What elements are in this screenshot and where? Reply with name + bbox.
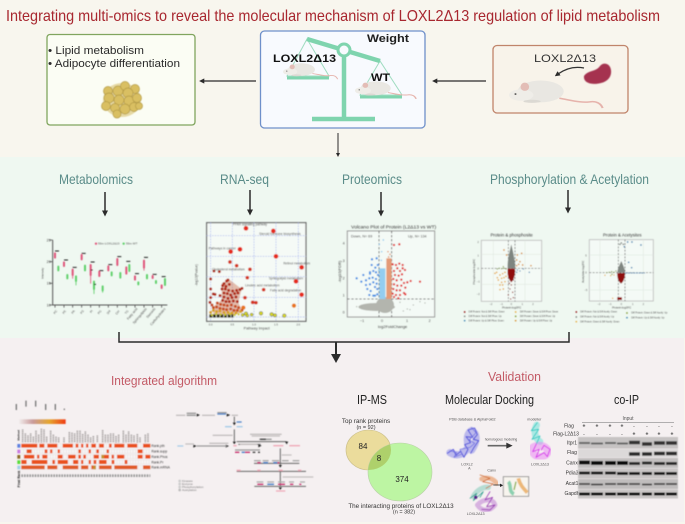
chart: metabolomics dot plot: PC (52, 309, 59, 315)
panel: co-IP western blot: Pdia3 (566, 470, 579, 476)
label: LOXL2Δ13: LOXL2Δ13 (534, 53, 596, 65)
chart: protein and acetylation scatter: 2 (643, 302, 645, 306)
legend: phosphosite categories: Diff Protein: Not & Diff Phos: Up (469, 315, 502, 318)
chart: RNA-seq pathway bubble plot: Steroid hormone biosynthesis (259, 232, 301, 236)
chart: RNA-seq pathway bubble plot: Fatty acid degradation (270, 289, 301, 293)
chart: IP-MS Venn diagram: (n = 382) (393, 510, 415, 516)
chart: metabolomics dot plot: PA (70, 309, 76, 315)
chart: proteomics volcano plot: 3 (343, 259, 345, 263)
chart: proteomics volcano plot: -log10(FDR) (337, 260, 342, 283)
panel: co-IP western blot: - (671, 424, 673, 430)
chart: metabolomics dot plot: PE (62, 309, 67, 315)
legend: phosphosite categories (464, 311, 559, 322)
chart: IP-MS Venn diagram: (n = 92) (356, 425, 376, 431)
legend: pathway symbols: Phosphorylation (182, 485, 204, 489)
label: input: Input (622, 416, 634, 422)
heading: metabolomics: Metabolomics (59, 171, 133, 187)
chart: proteomics volcano plot: 2 (429, 319, 431, 323)
legend: pathway symbols: Kinases (182, 479, 193, 483)
chart: protein and acetylation scatter: −1 (609, 302, 612, 306)
chart: rank heatmap: Rank.Pr (151, 460, 164, 464)
inset: binding interface (503, 477, 529, 496)
background: integration and validation section (0, 338, 684, 522)
chart: protein and acetylation scatter: 5 (585, 253, 587, 257)
chart: protein and phosphosite scatter: 2 (477, 240, 479, 244)
chart: RNA-seq pathway bubble plot: Cholesterol metabolism (212, 268, 245, 272)
label: LOXL2Δ13 group: LOXL2Δ13 (273, 53, 336, 65)
chart: metabolomics dot plot: 20 (47, 260, 51, 264)
icon: mouse (509, 81, 603, 108)
arrow: homologous modeling (488, 443, 507, 448)
legend: acetylation categories: Diff Protein: Down & Diff Acetly: Up (631, 312, 668, 315)
chart: protein and phosphosite scatter: 0 (511, 302, 513, 306)
panel: molecular docking structures: A (468, 467, 471, 471)
legend: acetylation categories: Diff Protein: Not & Diff Acetly: Down (580, 311, 618, 314)
chart: protein and phosphosite scatter: 1 (522, 302, 524, 306)
chart: molecular pathway diagram (176, 413, 313, 492)
text: lipid metabolism bullets (48, 45, 180, 70)
panel: co-IP western blot: + (671, 432, 674, 438)
chart: proteomics volcano plot: 2 (343, 276, 345, 280)
panel: molecular docking structures: homologous modeling (485, 438, 517, 442)
chart: proteomics volcano plot: 1 (406, 319, 408, 323)
chart: rank heatmap: Rank.Phos (151, 455, 168, 459)
text: lipid metabolism bullets: • Lipid metabolism (48, 45, 144, 57)
chart: RNA-seq pathway bubble plot: Pathways in cancer (209, 247, 236, 251)
chart: rank heatmap (16, 401, 171, 487)
arrow: omics bracket to integration (119, 332, 569, 363)
heading: RNA-seq: RNA-seq (220, 171, 269, 187)
panel: co-IP western blot: Flag (564, 424, 574, 430)
chart: protein and phosphosite scatter: −2 (477, 292, 480, 296)
chart: RNA-seq pathway bubble plot: -log10(Pvalue) (194, 264, 198, 286)
heading: phosphorylation and acetylation: Phosphorylation & Acetylation (490, 171, 649, 187)
icon: balance scale (287, 39, 402, 119)
chart: RNA-seq pathway bubble plot: Pathway Impact (244, 327, 270, 331)
chart: metabolomics dot plot: 15 (47, 282, 51, 286)
chart: protein and phosphosite scatter: 1 (477, 253, 479, 257)
panel: co-IP western blot: Canx (566, 460, 578, 466)
legend: pathway symbols (178, 479, 204, 492)
chart: metabolomics dot plot: Carbohydrates (149, 307, 167, 326)
chart: metabolomics dot plot: SM (106, 309, 112, 315)
panel: co-IP western blot: Itpr1 (567, 440, 577, 446)
structure: docked complex (470, 475, 497, 510)
legend: phosphosite categories: Diff Protein: Down & Diff Phos: Up (520, 315, 556, 318)
arrow: proteomics (380, 192, 382, 212)
chart: proteomics volcano plot: Volcano Plot of Protein (L2Δ13 vs WT) (351, 225, 437, 230)
heatmap row colours (17, 444, 20, 469)
chart: proteomics volcano plot: −1 (360, 319, 364, 323)
panel: weight scale (260, 31, 425, 128)
text: lipid metabolism bullets: • Adipocyte differentiation (48, 58, 180, 70)
panel: co-IP western blot: + (658, 432, 661, 438)
panel: molecular docking structures: LOXL2Δ13 (467, 512, 485, 516)
chart: IP-MS Venn diagram: 8 (377, 454, 382, 463)
heading: proteomics: Proteomics (342, 171, 402, 187)
chart: protein and phosphosite scatter: 2 (532, 302, 534, 306)
chart: IP-MS Venn diagram: 374 (395, 475, 409, 484)
venn: interacting proteins (368, 443, 432, 501)
chart: metabolomics dot plot: TG (124, 309, 130, 315)
chart: proteomics volcano plot: Up, N= 134 (408, 235, 427, 239)
chart: metabolomics dot plot: Fatty acid (126, 307, 139, 321)
chart: IP-MS Venn diagram: 84 (359, 442, 368, 451)
legend: pathway symbols: Enzyme (182, 482, 193, 486)
chart: RNA-seq pathway bubble plot: 1.5 (274, 323, 278, 327)
chart: RNA-seq pathway bubble plot: Linoleic acid metabolism (245, 284, 280, 288)
chart: proteomics volcano plot: 0 (343, 311, 345, 315)
legend: phosphosite categories: Diff Protein: Not & Diff Phos: Down (469, 311, 505, 314)
heading: co-IP: co-IP (614, 392, 639, 407)
chart: metabolomics dot plot (40, 238, 167, 326)
chart: rank heatmap: Rank.mRNA (151, 466, 171, 470)
chart: proteomics volcano plot: 0 (381, 319, 383, 323)
icon: tissue (584, 64, 611, 84)
panel: co-IP western blot: + (633, 432, 636, 438)
legend: acetylation categories: Diff Protein: Not & Diff Acetly: Up (580, 316, 615, 319)
chart: protein and phosphosite scatter: −2 (489, 302, 493, 306)
chart: rank heatmap: Method (16, 430, 20, 441)
chart: protein and acetylation scatter (575, 233, 668, 323)
panel: co-IP western blot: + (646, 432, 649, 438)
panel: molecular docking structures: LOXL2Δ13 (531, 463, 549, 467)
chart: RNA-seq pathway bubble plot: Sphingolipid metabolism (269, 276, 303, 280)
panel: phenotype outcome (47, 34, 195, 125)
panel: co-IP western blot: Gapdh (564, 491, 580, 497)
chart: protein and acetylation scatter: 1 (632, 302, 634, 306)
legend: acetylation categories: Diff Protein: Up & Diff Acetly: Up (631, 316, 665, 319)
panel: co-IP western blot (553, 416, 678, 498)
venn: top rank proteins (346, 430, 391, 470)
chart: rank heatmap: Final Rank (17, 470, 21, 487)
panel: co-IP western blot: + (621, 424, 624, 430)
chart: proteomics volcano plot: Down, N= 69 (351, 235, 372, 239)
arrowhead (506, 443, 513, 449)
arrow: metabolomics (104, 192, 106, 212)
panel: co-IP western blot: - (633, 424, 635, 430)
chart: metabolomics dot plot: PG (97, 309, 103, 315)
label: WT group: WT (371, 72, 390, 84)
structure: LOXL2 (447, 427, 479, 457)
legend: acetylation categories: Diff Protein: Down & Diff Acetly: Down (580, 320, 620, 323)
chart: rank heatmap: Rank.supp (151, 450, 167, 454)
chart: protein and acetylation scatter: −2 (597, 302, 601, 306)
chart: RNA-seq pathway bubble plot: 2.0 (296, 323, 301, 327)
panel: co-IP western blot: - (621, 432, 623, 438)
chart: metabolomics dot plot: PS (79, 309, 85, 315)
heading: IP-MS: IP-MS (357, 392, 387, 407)
chart: RNA-seq pathway bubble plot: 0.0 (209, 323, 213, 327)
structure: modelled LOXL2Δ13 (531, 423, 550, 457)
panel: co-IP western blot: - (658, 424, 660, 430)
arrowhead (500, 484, 503, 487)
heading: molecular docking: Molecular Docking (445, 392, 534, 407)
chart: protein and acetylation scatter: Acetylsite-log2FC (581, 261, 585, 283)
arrow: zoomed binding site (493, 484, 500, 486)
panel: co-IP western blot: - (646, 424, 648, 430)
chart: protein and phosphosite scatter: Phosphosite-log2FC (472, 259, 476, 284)
chart: IP-MS Venn diagram (342, 418, 454, 516)
legend: acetylation categories (575, 311, 668, 323)
legend: pathway symbols: Acetylation (182, 488, 197, 492)
chart: RNA-seq pathway bubble plot: Retinol metabolism (283, 262, 310, 266)
chart: metabolomics dot plot: 10 (47, 303, 51, 307)
icon: WT mouse on scale (355, 81, 416, 99)
chart: rank heatmap: Rank.pth (151, 444, 165, 448)
legend: mouse groups: 59m-LOXL2Δ13 (98, 242, 120, 246)
icon: adipocyte cluster (102, 82, 142, 118)
chart: RNA-seq pathway bubble plot: PPAR signaling pathway (233, 223, 268, 227)
panel: molecular docking structures (447, 418, 550, 516)
arrow: mouse model to scale (436, 80, 486, 82)
arrow: curved injection (558, 67, 584, 74)
chart: metabolomics dot plot: Intensity (40, 267, 44, 279)
background: top section (0, 0, 685, 157)
western blot bands (578, 437, 678, 498)
chart: protein and acetylation scatter: 0 (621, 302, 623, 306)
label: weight: Weight (367, 33, 409, 45)
panel: molecular docking structures: PDB database & AlphaFold2 (449, 418, 496, 422)
panel: co-IP western blot: - (596, 432, 598, 438)
venn: overlap (368, 444, 391, 470)
legend: mouse groups (95, 242, 138, 246)
chart: protein and phosphosite scatter: −1 (477, 279, 480, 283)
arrow: phosphorylation (567, 190, 569, 209)
panel: co-IP western blot: + (596, 424, 599, 430)
background: omics section (0, 157, 685, 338)
panel: co-IP western blot: Flag (567, 450, 577, 456)
chart: metabolomics dot plot: Steroids (145, 307, 157, 319)
panel: co-IP western blot: - (583, 432, 585, 438)
chart: metabolomics dot plot: 25 (47, 238, 51, 242)
arrow: phenotype to omics (337, 133, 339, 154)
chart: proteomics volcano plot: log2FoldChange (378, 324, 408, 329)
legend: phosphosite categories: Diff Protein: Up & Diff Phos: Down (469, 319, 505, 322)
heading: validation: Validation (488, 369, 541, 384)
panel: co-IP western blot: + (583, 424, 586, 430)
chart: IP-MS Venn diagram: The interacting proteins of LOXL2Δ13 (348, 503, 454, 510)
chart: protein and acetylation scatter: Protein-log2FC (612, 305, 631, 309)
panel: co-IP western blot: Acat1 (566, 481, 579, 487)
chart: RNA-seq pathway bubble plot (194, 223, 310, 331)
chart: protein and phosphosite scatter (464, 233, 559, 322)
chart: protein and phosphosite scatter: 0 (477, 267, 479, 271)
chart: metabolomics dot plot: Sphingolipids (132, 307, 148, 325)
legend: phosphosite categories: Diff Protein: Down & Diff Phos: Down (520, 311, 559, 314)
chart: metabolomics dot plot: PI (89, 309, 94, 314)
chart: protein and phosphosite scatter: −1 (500, 302, 504, 306)
chart: proteomics volcano plot (337, 225, 437, 329)
legend: mouse groups: 59m-WT (126, 242, 138, 246)
icon: LOXL2Δ13 mouse on scale (283, 63, 338, 79)
arrow: scale to phenotype (203, 80, 256, 82)
panel: molecular docking structures: LOXL2 (461, 463, 473, 467)
chart: protein and phosphosite scatter: Protein-log2FC (502, 305, 521, 309)
panel: co-IP western blot: - (609, 432, 611, 438)
panel: LOXL2Δ13 mouse model (493, 46, 628, 113)
panel: molecular docking structures: Canx (487, 469, 496, 473)
chart: proteomics volcano plot: 4 (343, 242, 345, 246)
panel: co-IP western blot: Flag-L2Δ13 (553, 432, 579, 438)
chart: RNA-seq pathway bubble plot: 1.0 (252, 323, 256, 327)
chart: protein and acetylation scatter: 0 (585, 271, 587, 275)
panel: molecular docking structures: modeller (527, 418, 542, 422)
chart: protein and phosphosite scatter: Protein & phosphosite (490, 233, 533, 238)
chart: proteomics volcano plot: 1 (343, 294, 345, 298)
chart: RNA-seq pathway bubble plot: 0.5 (230, 323, 235, 327)
chart: protein and acetylation scatter: −5 (584, 288, 588, 292)
chart: IP-MS Venn diagram: Top rank proteins (342, 418, 390, 425)
legend: phosphosite categories: Diff Protein: Up & Diff Phos: Up (520, 319, 553, 322)
panel: co-IP western blot: + (609, 424, 612, 430)
heading: integrated algorithm: Integrated algorithm (111, 373, 217, 388)
chart: metabolomics dot plot: Cer (114, 309, 120, 316)
chart: protein and acetylation scatter: Protein & Acetysites (603, 233, 642, 238)
arrow: RNA-seq (249, 190, 251, 211)
